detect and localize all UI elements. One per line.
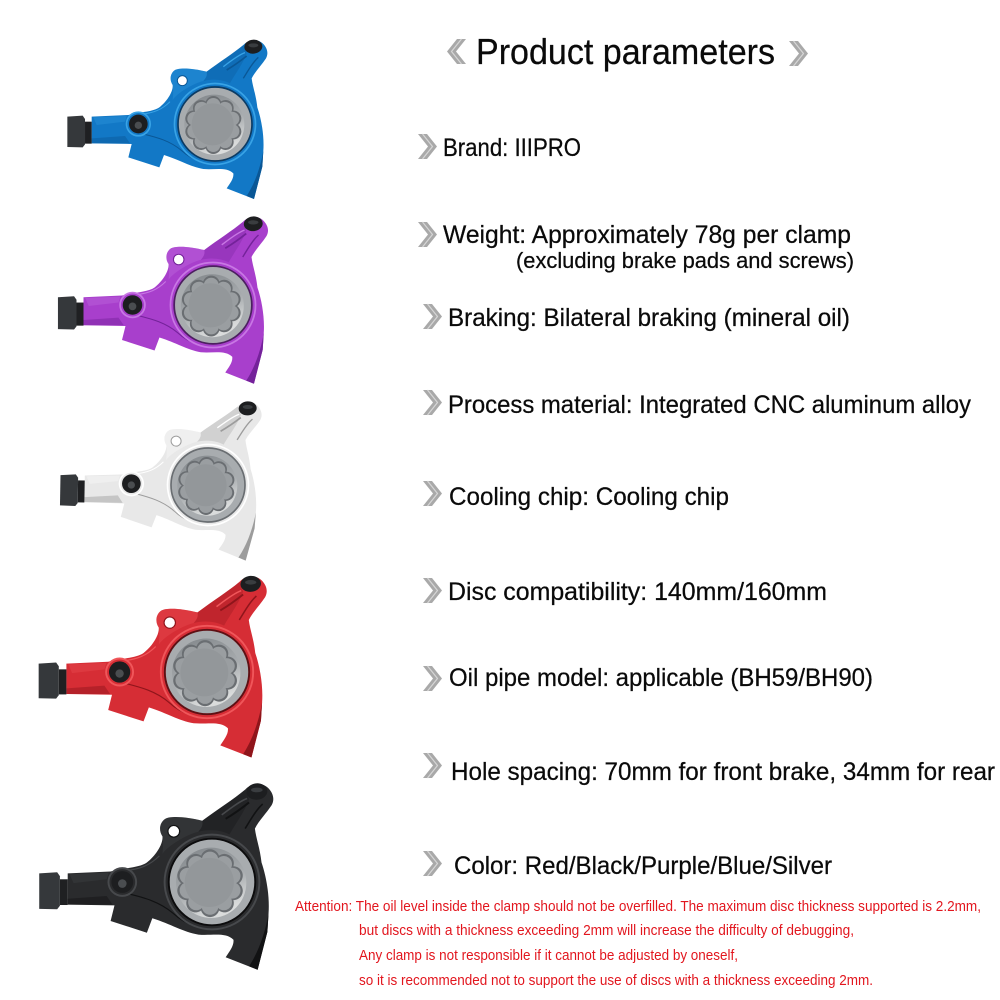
spec: brand: Brand: IIIPRO	[443, 134, 581, 162]
spec: braking: Braking: Bilateral braking (mineral oil)	[448, 304, 850, 332]
spec: weight: Weight: Approximately 78g per clamp	[443, 221, 851, 249]
spec: hole spacing: Hole spacing: 70mm for front brake, 34mm for rear	[451, 758, 995, 786]
spec: color: Color: Red/Black/Purple/Blue/Silver	[454, 852, 832, 880]
icon: left double chevron	[447, 39, 466, 64]
heading: product parameters	[447, 31, 808, 72]
spec: disc compatibility: Disc compatibility: 140mm/160mm	[448, 578, 827, 606]
title text: Product parameters	[476, 31, 775, 72]
caliper: purple	[58, 216, 268, 384]
spec: cooling chip: Cooling chip: Cooling chip	[449, 483, 729, 511]
caliper: silver	[59, 397, 262, 561]
attention note: Any clamp is not responsible if it cannot be adjusted by oneself,	[359, 947, 738, 964]
attention note: so it is recommended not to support the use of discs with a thickness exceeding 2mm.	[359, 972, 873, 989]
attention note: but discs with a thickness exceeding 2mm will increase the difficulty of debugging,	[359, 922, 854, 939]
caliper: red	[39, 575, 267, 758]
spec: oil pipe model: Oil pipe model: applicable (BH59/BH90)	[449, 664, 873, 692]
attention note	[295, 898, 981, 989]
caliper: black	[39, 782, 273, 970]
spec: process material: Process material: Integrated CNC aluminum alloy	[448, 391, 971, 419]
icon: right double chevron	[789, 41, 808, 66]
spec: weight	[418, 221, 854, 273]
spec: weight: (excluding brake pads and screws)	[516, 248, 854, 273]
caliper: blue	[67, 39, 267, 199]
